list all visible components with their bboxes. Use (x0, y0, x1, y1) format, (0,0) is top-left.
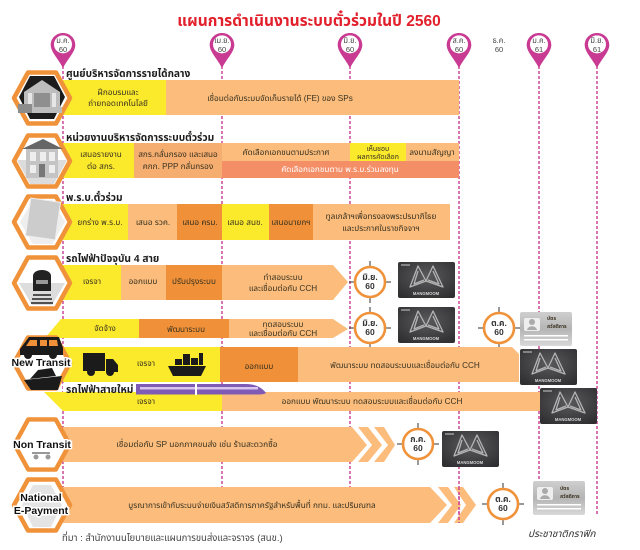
marker label: ธ.ค. 60: ธ.ค. (493, 36, 505, 45)
heading: ศูนย์บริหารจัดการรายได้กลาง (66, 67, 190, 80)
chevrons (438, 487, 476, 523)
panel: current four lines (14, 253, 455, 308)
bar: pm (269, 204, 313, 240)
icon: truck (83, 353, 118, 376)
pin: ม.ค. 61: 61 (535, 45, 543, 54)
target: October 60: ต.ค. (495, 494, 511, 504)
pin: มิ.ย. 60: มิ.ย. (343, 36, 357, 45)
heading: พ.ร.บ.ตั๋วร่วม (66, 190, 123, 204)
target: June 60 (349, 307, 391, 349)
arrow: test and connect (222, 265, 348, 300)
bar: connect FE (166, 80, 459, 115)
target: October 60: 60 (494, 327, 504, 337)
card (442, 431, 499, 467)
icon: train (14, 258, 70, 308)
arrow: test: ทดสอบระบบ (262, 320, 304, 329)
panel: new transit row one (45, 307, 572, 349)
arrow: connect SP (63, 427, 367, 462)
card: MANGMOOM (535, 378, 562, 383)
heading: หน่วยงานบริหารจัดการระบบตั๋วร่วม (66, 130, 214, 144)
pin: เม.ย. 60: เม.ย. (214, 36, 230, 45)
citizen card: สวัสดิการ (560, 493, 580, 500)
card (540, 388, 597, 424)
bar: design: ออกแบบ (245, 362, 273, 371)
bar: cabinet: เสนอ ครม. (182, 218, 218, 227)
arrow: test: และเชื่อมต่อกับ CCH (249, 327, 317, 338)
bar: negotiate (63, 347, 220, 382)
panel: revenue clearing centre (14, 67, 459, 124)
pin: ส.ค. 60: 60 (455, 45, 463, 54)
icon: house (14, 136, 70, 186)
arrow: negotiate: เจรจา (137, 397, 155, 406)
panel: joint ticket act (14, 190, 450, 248)
arrow: procure (45, 319, 139, 338)
bar: report (63, 143, 134, 178)
bar: report: ต่อ สกร. (87, 161, 115, 171)
timeline dashed guide lines (63, 66, 597, 523)
card: MANGMOOM (413, 291, 440, 296)
pin: ม.ค. 61 (527, 33, 551, 68)
bar: sign: ลงนามสัญญา (409, 147, 455, 157)
bar: upgrade (166, 265, 222, 300)
bar: screening: สกร.กลั่นกรอง และเสนอ (138, 148, 218, 159)
panel: new transit icon (12, 337, 71, 390)
panel: national e-payment (14, 480, 585, 530)
arrow: connect SP: เชื่อมต่อกับ SP นอกภาคขนส่ง เช่น ร้านสะดวกซื้อ (116, 438, 278, 449)
bar: negotiate (63, 265, 121, 300)
timeline month markers (51, 33, 609, 68)
arrow: test and connect: ทำสอบระบบ (263, 273, 303, 282)
credit: ประชาชาติกราฟิก (528, 529, 597, 540)
icon with label: Non Transit (13, 439, 71, 451)
target: June 60: 60 (365, 281, 375, 291)
arrow: develop (298, 347, 519, 382)
bar: select by announcement: คัดเลือกเอกชนตามประกาศ (243, 147, 329, 157)
bar: training: ถ่ายทอดเทคโนโลยี (88, 98, 148, 108)
bar: approve: เห็นชอบ (367, 145, 389, 153)
pin: ม.ค. 61: ม.ค. (532, 36, 546, 45)
arrow: develop: พัฒนาระบบ ทดสอบระบบและเชื่อมต่อกับ CCH (330, 359, 480, 370)
bar: select by act (222, 161, 459, 178)
bar: draft: ยกร่าง พ.ร.บ. (77, 217, 123, 227)
citizen card (520, 312, 572, 346)
bar: pm: เสนอนายกฯ (271, 218, 311, 227)
icon: hexagon (14, 338, 70, 388)
target: June 60: มิ.ย. (362, 272, 378, 282)
icon: ship (24, 368, 62, 390)
bar: training (63, 80, 166, 115)
bar: nla: เสนอ สนช. (227, 218, 263, 227)
bar: design develop test (222, 392, 540, 411)
bar: negotiate: เจรจา (137, 359, 155, 368)
panel: new transit row two (63, 347, 577, 385)
bar: nla (222, 204, 269, 240)
bar: training: ฝึกอบรมและ (98, 88, 139, 97)
bar: develop (139, 319, 229, 338)
target: July 60 (397, 423, 439, 465)
bar: approve: ผลการคัดเลือก (357, 153, 399, 161)
bar: screening: คกก. PPP กลั่นกรอง (143, 160, 213, 171)
bar: upgrade: ปรับปรุงระบบ (172, 276, 216, 286)
target: October 60 (482, 483, 524, 525)
bar: report: เสนอรายงาน (80, 150, 122, 159)
pin: มิ.ย. 61: มิ.ย. (590, 36, 604, 45)
pin: ม.ค. 60 (51, 33, 75, 68)
icon with label (14, 480, 70, 530)
bar: design (220, 347, 298, 382)
title: แผนการดำเนินงานระบบตั๋วร่วมในปี 2560 (177, 10, 441, 30)
card (398, 262, 455, 298)
marker label: ธ.ค. 60 (493, 36, 505, 54)
bar: screening (134, 143, 222, 178)
card (398, 307, 455, 343)
pin: มิ.ย. 61: 61 (593, 45, 601, 54)
icon: train (136, 384, 266, 395)
arrow: test and connect: และเชื่อมต่อกับ CCH (249, 282, 317, 293)
arrow: test (229, 319, 348, 338)
bar: royal: และประกาศในราชกิจจาฯ (342, 224, 420, 233)
pin: เม.ย. 60 (210, 33, 234, 68)
pin: ม.ค. 60: 60 (59, 45, 67, 54)
bar: approve (350, 143, 406, 161)
pin: มิ.ย. 61 (585, 33, 609, 68)
icon: van (20, 337, 63, 359)
citizen card (533, 481, 585, 515)
label: New Transit (12, 357, 71, 369)
bar: design develop test: ออกแบบ พัฒนาระบบ ทดสอบระบบและเชื่อมต่อกับ CCH (282, 395, 462, 406)
arrow: procure: จัดจ้าง (94, 323, 116, 333)
bar: cabinet (177, 204, 222, 240)
chevrons (358, 427, 395, 462)
arrow: welfare payment: บูรณาการเข้ากับระบบจ่ายเงินสวัสดิการภาครัฐสำหรับพื้นที่ กทม. และปริมณฑล (128, 499, 376, 511)
icon with label (13, 419, 71, 470)
marker label: ธ.ค. 60: 60 (495, 45, 503, 54)
icon with label: E-Payment (14, 505, 69, 517)
target: June 60 (349, 261, 391, 303)
pin: มิ.ย. 60: 60 (346, 45, 354, 54)
panel: new lines (44, 383, 597, 424)
card: MANGMOOM (555, 417, 582, 422)
bar: minister (128, 204, 177, 240)
card (520, 349, 577, 385)
bar: negotiate: เจรจา (83, 277, 101, 286)
target: October 60: ต.ค. (491, 318, 507, 328)
bar: draft (63, 204, 128, 240)
pin: ม.ค. 60: ม.ค. (56, 36, 70, 45)
source text: ที่มา : สำนักงานนโยบายและแผนการขนส่งและจราจร (สนข.) (62, 531, 283, 544)
pin: ส.ค. 60 (447, 33, 471, 68)
icon: document (14, 196, 70, 248)
bar: royal: ทูลเกล้าฯเพื่อทรงลงพระปรมาภิไธย (326, 210, 436, 222)
heading: รถไฟฟ้าสายใหม่ (66, 383, 134, 396)
pin: ส.ค. 60: ส.ค. (452, 36, 466, 45)
bar: design: ออกแบบ (129, 277, 157, 286)
citizen card: บัตร (560, 485, 569, 492)
panel: non transit (13, 419, 499, 470)
target: October 60: 60 (498, 503, 508, 513)
bar: sign (406, 143, 459, 161)
arrow: negotiate (44, 392, 222, 411)
bar: minister: เสนอ รวค. (136, 218, 170, 227)
citizen card: บัตร (547, 315, 556, 322)
bar: royal (313, 204, 450, 240)
bar: design (121, 265, 166, 300)
icon with label: National (20, 492, 62, 504)
panel: joint ticket agency (14, 130, 459, 186)
card: MANGMOOM (413, 336, 440, 341)
target: July 60: ก.ค. (410, 434, 426, 444)
icon: building (14, 72, 70, 124)
bar: connect FE: เชื่อมต่อกับระบบจัดเก็บรายได้ (FE) ของ SPs (207, 92, 353, 103)
pin: เม.ย. 60: 60 (218, 45, 226, 54)
target: June 60: มิ.ย. (362, 318, 378, 328)
bar: select by act: คัดเลือกเอกชนตาม พ.ร.บ.ร่วมลงทุน (281, 164, 399, 174)
card: MANGMOOM (457, 460, 484, 465)
citizen card: สวัสดิการ (547, 323, 567, 330)
target: June 60: 60 (365, 327, 375, 337)
icon: cargo ship (168, 353, 206, 376)
bar: develop: พัฒนาระบบ (167, 324, 205, 334)
bar: select by announcement (222, 143, 350, 161)
pin: มิ.ย. 60 (338, 33, 362, 68)
target: July 60: 60 (413, 443, 423, 453)
arrow: welfare payment (63, 487, 447, 523)
target: October 60 (478, 307, 520, 349)
dashed line overlay (458, 487, 460, 523)
heading: รถไฟฟ้าปัจจุบัน 4 สาย (66, 253, 159, 265)
